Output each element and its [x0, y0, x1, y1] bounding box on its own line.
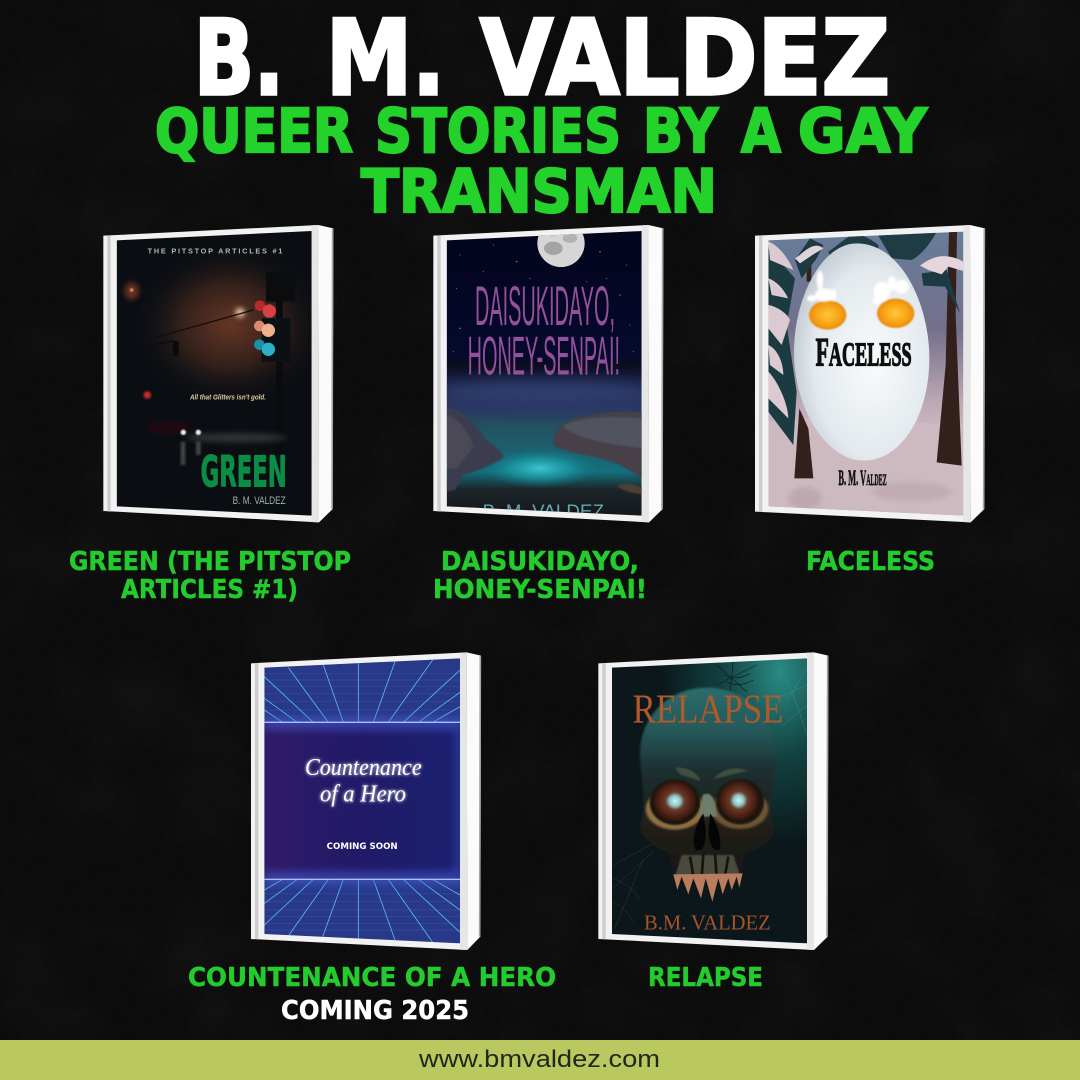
caption: coming 2025: COMING 2025 — [281, 996, 469, 1026]
caption: Green — [69, 547, 351, 605]
cover art: Green — [117, 228, 330, 518]
cover art: Countenance: Countenance — [305, 754, 422, 781]
caption: Green: ARTICLES #1) — [121, 575, 298, 605]
subtitle: QUEER — [155, 96, 353, 167]
cover art: Green: GREEN — [201, 448, 287, 497]
subtitle — [155, 96, 928, 227]
subtitle: BY — [643, 96, 719, 167]
caption: Daisukidayo — [433, 547, 647, 605]
title: author name — [194, 0, 890, 119]
website url: www.bmvaldez.com — [418, 1046, 660, 1073]
caption: Daisukidayo: DAISUKIDAYO, — [441, 547, 639, 577]
cover art: Relapse: RELAPSE — [633, 686, 783, 732]
cover art: Faceless — [768, 228, 965, 518]
title: author name: VALDEZ — [480, 0, 890, 119]
book: Relapse — [598, 652, 828, 950]
cover art: Green: THE PITSTOP ARTICLES #1 — [148, 246, 282, 255]
cover art: Relapse — [610, 655, 810, 945]
caption: Green: GREEN (THE PITSTOP — [69, 547, 351, 577]
caption: Countenance of a Hero: COUNTENANCE OF A HERO — [188, 963, 556, 993]
cover art: Daisukidayo: B. M. VALDEZ — [483, 501, 604, 522]
subtitle: A — [741, 96, 781, 167]
footer bar — [0, 1040, 1080, 1080]
cover art: Countenance: of a Hero — [320, 781, 406, 808]
text: HONEY-SENPAI! — [468, 325, 620, 386]
cover art: Faceless: B. M. VALDEZ — [838, 465, 887, 490]
book: Daisukidayo — [433, 220, 663, 522]
subtitle: GAY — [798, 96, 928, 167]
book: Faceless — [755, 225, 985, 522]
cover art: Daisukidayo — [446, 231, 642, 516]
subtitle: STORIES — [375, 96, 621, 167]
cover art: Relapse: B.M. VALDEZ — [644, 912, 771, 934]
title: author name: M. — [326, 0, 445, 119]
book: Countenance of a Hero — [251, 652, 481, 950]
cover art: Countenance: COMING SOON — [327, 842, 398, 852]
cover art: Green: All that Glitters isn't gold. — [189, 394, 266, 401]
cover art: Countenance — [263, 655, 463, 945]
cover art: Green: B. M. VALDEZ — [233, 495, 286, 507]
caption: Faceless: FACELESS — [806, 547, 935, 577]
text: DAISUKIDAYO, — [475, 275, 615, 337]
caption: Relapse: RELAPSE — [648, 963, 763, 993]
subtitle: TRANSMAN — [361, 157, 717, 227]
book: Green — [103, 225, 333, 522]
title: author name: B. — [194, 0, 284, 119]
cover art: Faceless: FACELESS — [816, 330, 912, 375]
caption: Daisukidayo: HONEY-SENPAI! — [433, 575, 647, 605]
